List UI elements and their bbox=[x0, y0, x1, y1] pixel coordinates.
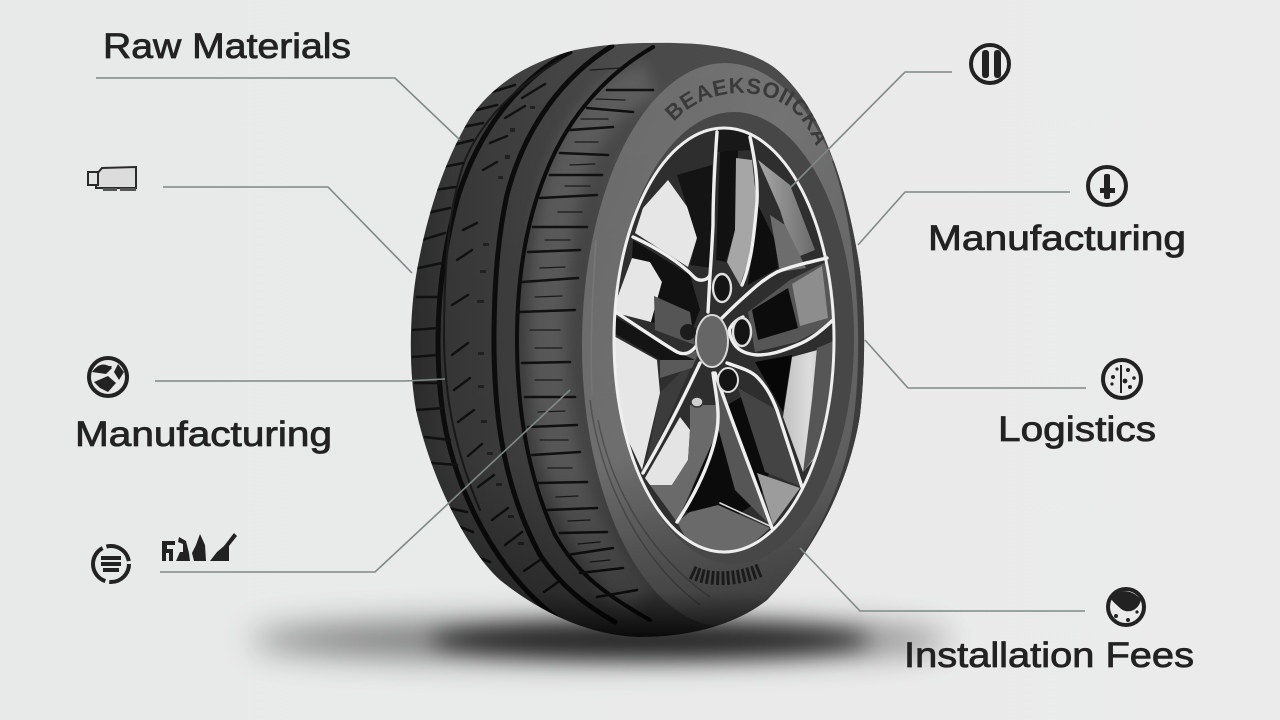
window: upper left bbox=[635, 180, 697, 267]
spokes bbox=[617, 132, 833, 528]
icon: garbled glyphs bbox=[162, 533, 237, 561]
wheel bbox=[612, 128, 836, 560]
bottom darkening bbox=[442, 470, 840, 637]
leader line: logistics bbox=[865, 340, 1086, 388]
tread: IIIIIIIIIIIIII bbox=[689, 564, 762, 586]
hub bbox=[696, 315, 728, 367]
leader line: top right bbox=[790, 72, 952, 188]
left shoulder sipes bbox=[413, 85, 515, 562]
tread grooves bbox=[438, 46, 653, 628]
sidewall ridges bbox=[590, 240, 710, 605]
tire bbox=[410, 42, 864, 637]
tread bbox=[410, 42, 864, 637]
window: lower left bbox=[612, 335, 660, 470]
sidewall lettering: BEAEKSOIICKA bbox=[664, 78, 824, 146]
bottom panel bbox=[678, 505, 770, 550]
icon: broken ring with stacked bars bbox=[93, 546, 129, 582]
leader line: raw materials bbox=[96, 78, 460, 140]
shoulder tread highlight bbox=[548, 80, 650, 600]
window: lower left small bbox=[645, 417, 690, 485]
leader line: manufacturing left bbox=[155, 379, 445, 381]
right hole bbox=[748, 262, 834, 352]
center rib dots bbox=[477, 106, 535, 545]
window: left bbox=[612, 258, 662, 322]
leader line: truck icon bbox=[163, 187, 412, 273]
lower wedge bbox=[757, 473, 800, 525]
icon: installation dial bbox=[1108, 589, 1144, 625]
wheel opening base bbox=[614, 128, 834, 552]
leader line: bottom left bbox=[160, 390, 570, 572]
sidewall bbox=[582, 63, 868, 627]
shoulder sipes bbox=[518, 90, 653, 597]
lower right areas bbox=[783, 350, 817, 472]
ground shadow bbox=[250, 620, 950, 660]
label: logistics: Logistics bbox=[998, 410, 1156, 449]
heading: raw materials: Raw Materials bbox=[103, 27, 351, 66]
label: installation fees: Installation Fees bbox=[904, 636, 1194, 675]
center rib slanted sipes bbox=[452, 84, 558, 592]
icon: globe bbox=[89, 358, 127, 396]
label: manufacturing left: Manufacturing bbox=[75, 415, 332, 454]
label: manufacturing right: Manufacturing bbox=[928, 219, 1186, 258]
leader line: manufacturing right bbox=[858, 192, 1070, 245]
spoke: left dark bbox=[632, 240, 700, 330]
icon: dotted dial bbox=[1103, 360, 1141, 398]
icon: cross bbox=[1088, 167, 1126, 205]
fine shoulder sipes bbox=[530, 68, 625, 562]
wheel rim ring bbox=[614, 128, 834, 552]
lug holes bbox=[680, 274, 751, 407]
top dark pockets bbox=[677, 165, 712, 268]
spoke: lower left fill bbox=[650, 405, 717, 522]
icon: top right, pills bbox=[971, 45, 1009, 83]
right edge band bbox=[780, 160, 861, 590]
leader line: installation fees bbox=[800, 548, 1085, 611]
spoke: lower center fill bbox=[716, 380, 768, 524]
spoke: lower right fill bbox=[738, 388, 802, 487]
rim band bbox=[614, 112, 854, 564]
icon: truck bbox=[88, 167, 136, 191]
